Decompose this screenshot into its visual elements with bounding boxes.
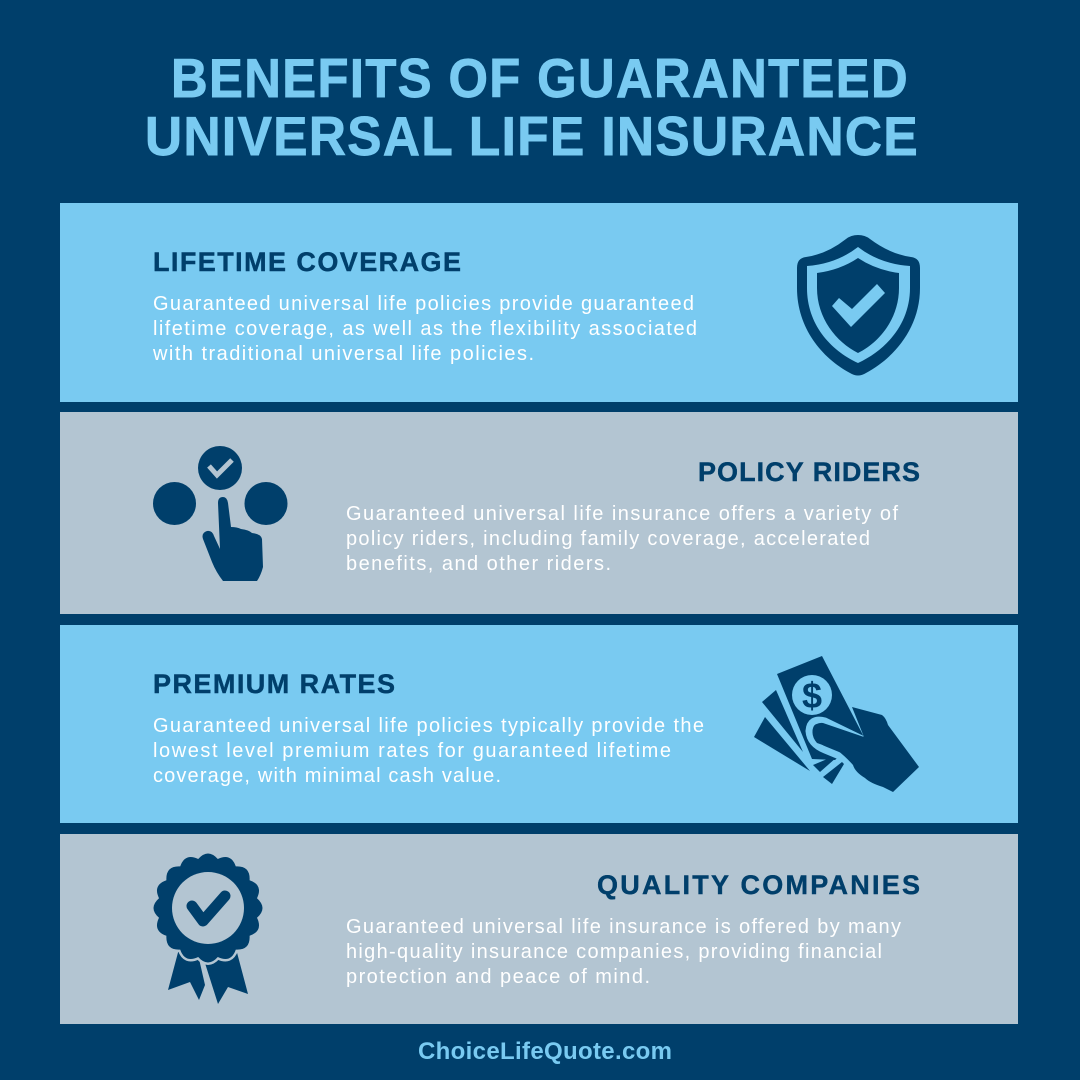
heading: premium rates: PREMIUM RATES [153, 669, 395, 699]
text block: premium rates [153, 715, 704, 787]
title: BENEFITS OF GUARANTEED [171, 47, 909, 109]
text block: lifetime coverage: lifetime coverage, as well as the flexibility associated [153, 318, 697, 340]
text block: lifetime coverage [152, 293, 697, 365]
title [145, 47, 919, 167]
text block: lifetime coverage: with traditional universal life policies. [152, 343, 534, 365]
heading: quality companies: QUALITY COMPANIES [597, 870, 920, 900]
panel: quality companies [60, 834, 1018, 1024]
text block: quality companies [346, 916, 901, 988]
text block: premium rates: lowest level premium rates for guaranteed lifetime [153, 740, 671, 762]
heading: lifetime coverage: LIFETIME COVERAGE [153, 247, 461, 277]
text block: quality companies: Guaranteed universal life insurance is offered by many [346, 916, 901, 938]
icon: hand choosing option [153, 446, 288, 581]
text block: quality companies: protection and peace of mind. [346, 966, 650, 988]
text block: policy riders: policy riders, including family coverage, accelerated [346, 528, 870, 550]
text block: quality companies: high-quality insurance companies, providing financial [346, 941, 882, 963]
icon: shield with check [797, 235, 920, 376]
text block: policy riders: benefits, and other riders. [346, 553, 611, 575]
heading: policy riders: POLICY RIDERS [698, 457, 920, 487]
footer: website: ChoiceLifeQuote.com [418, 1038, 672, 1065]
icon: dollar sign: $ [802, 675, 822, 716]
text block: lifetime coverage: Guaranteed universal life policies provide guaranteed [153, 293, 694, 315]
text block: premium rates: Guaranteed universal life policies typically provide the [153, 715, 704, 737]
text block: premium rates: coverage, with minimal cash value. [153, 765, 501, 787]
text block: policy riders: Guaranteed universal life insurance offers a variety of [346, 503, 898, 525]
icon: award ribbon badge [154, 854, 262, 1004]
panel: policy riders [60, 412, 1018, 614]
text block: policy riders [346, 503, 898, 575]
title: UNIVERSAL LIFE INSURANCE [145, 105, 919, 167]
panel: lifetime coverage [60, 203, 1018, 402]
panel: premium rates [60, 625, 1018, 823]
icon: hand holding money [754, 656, 919, 792]
